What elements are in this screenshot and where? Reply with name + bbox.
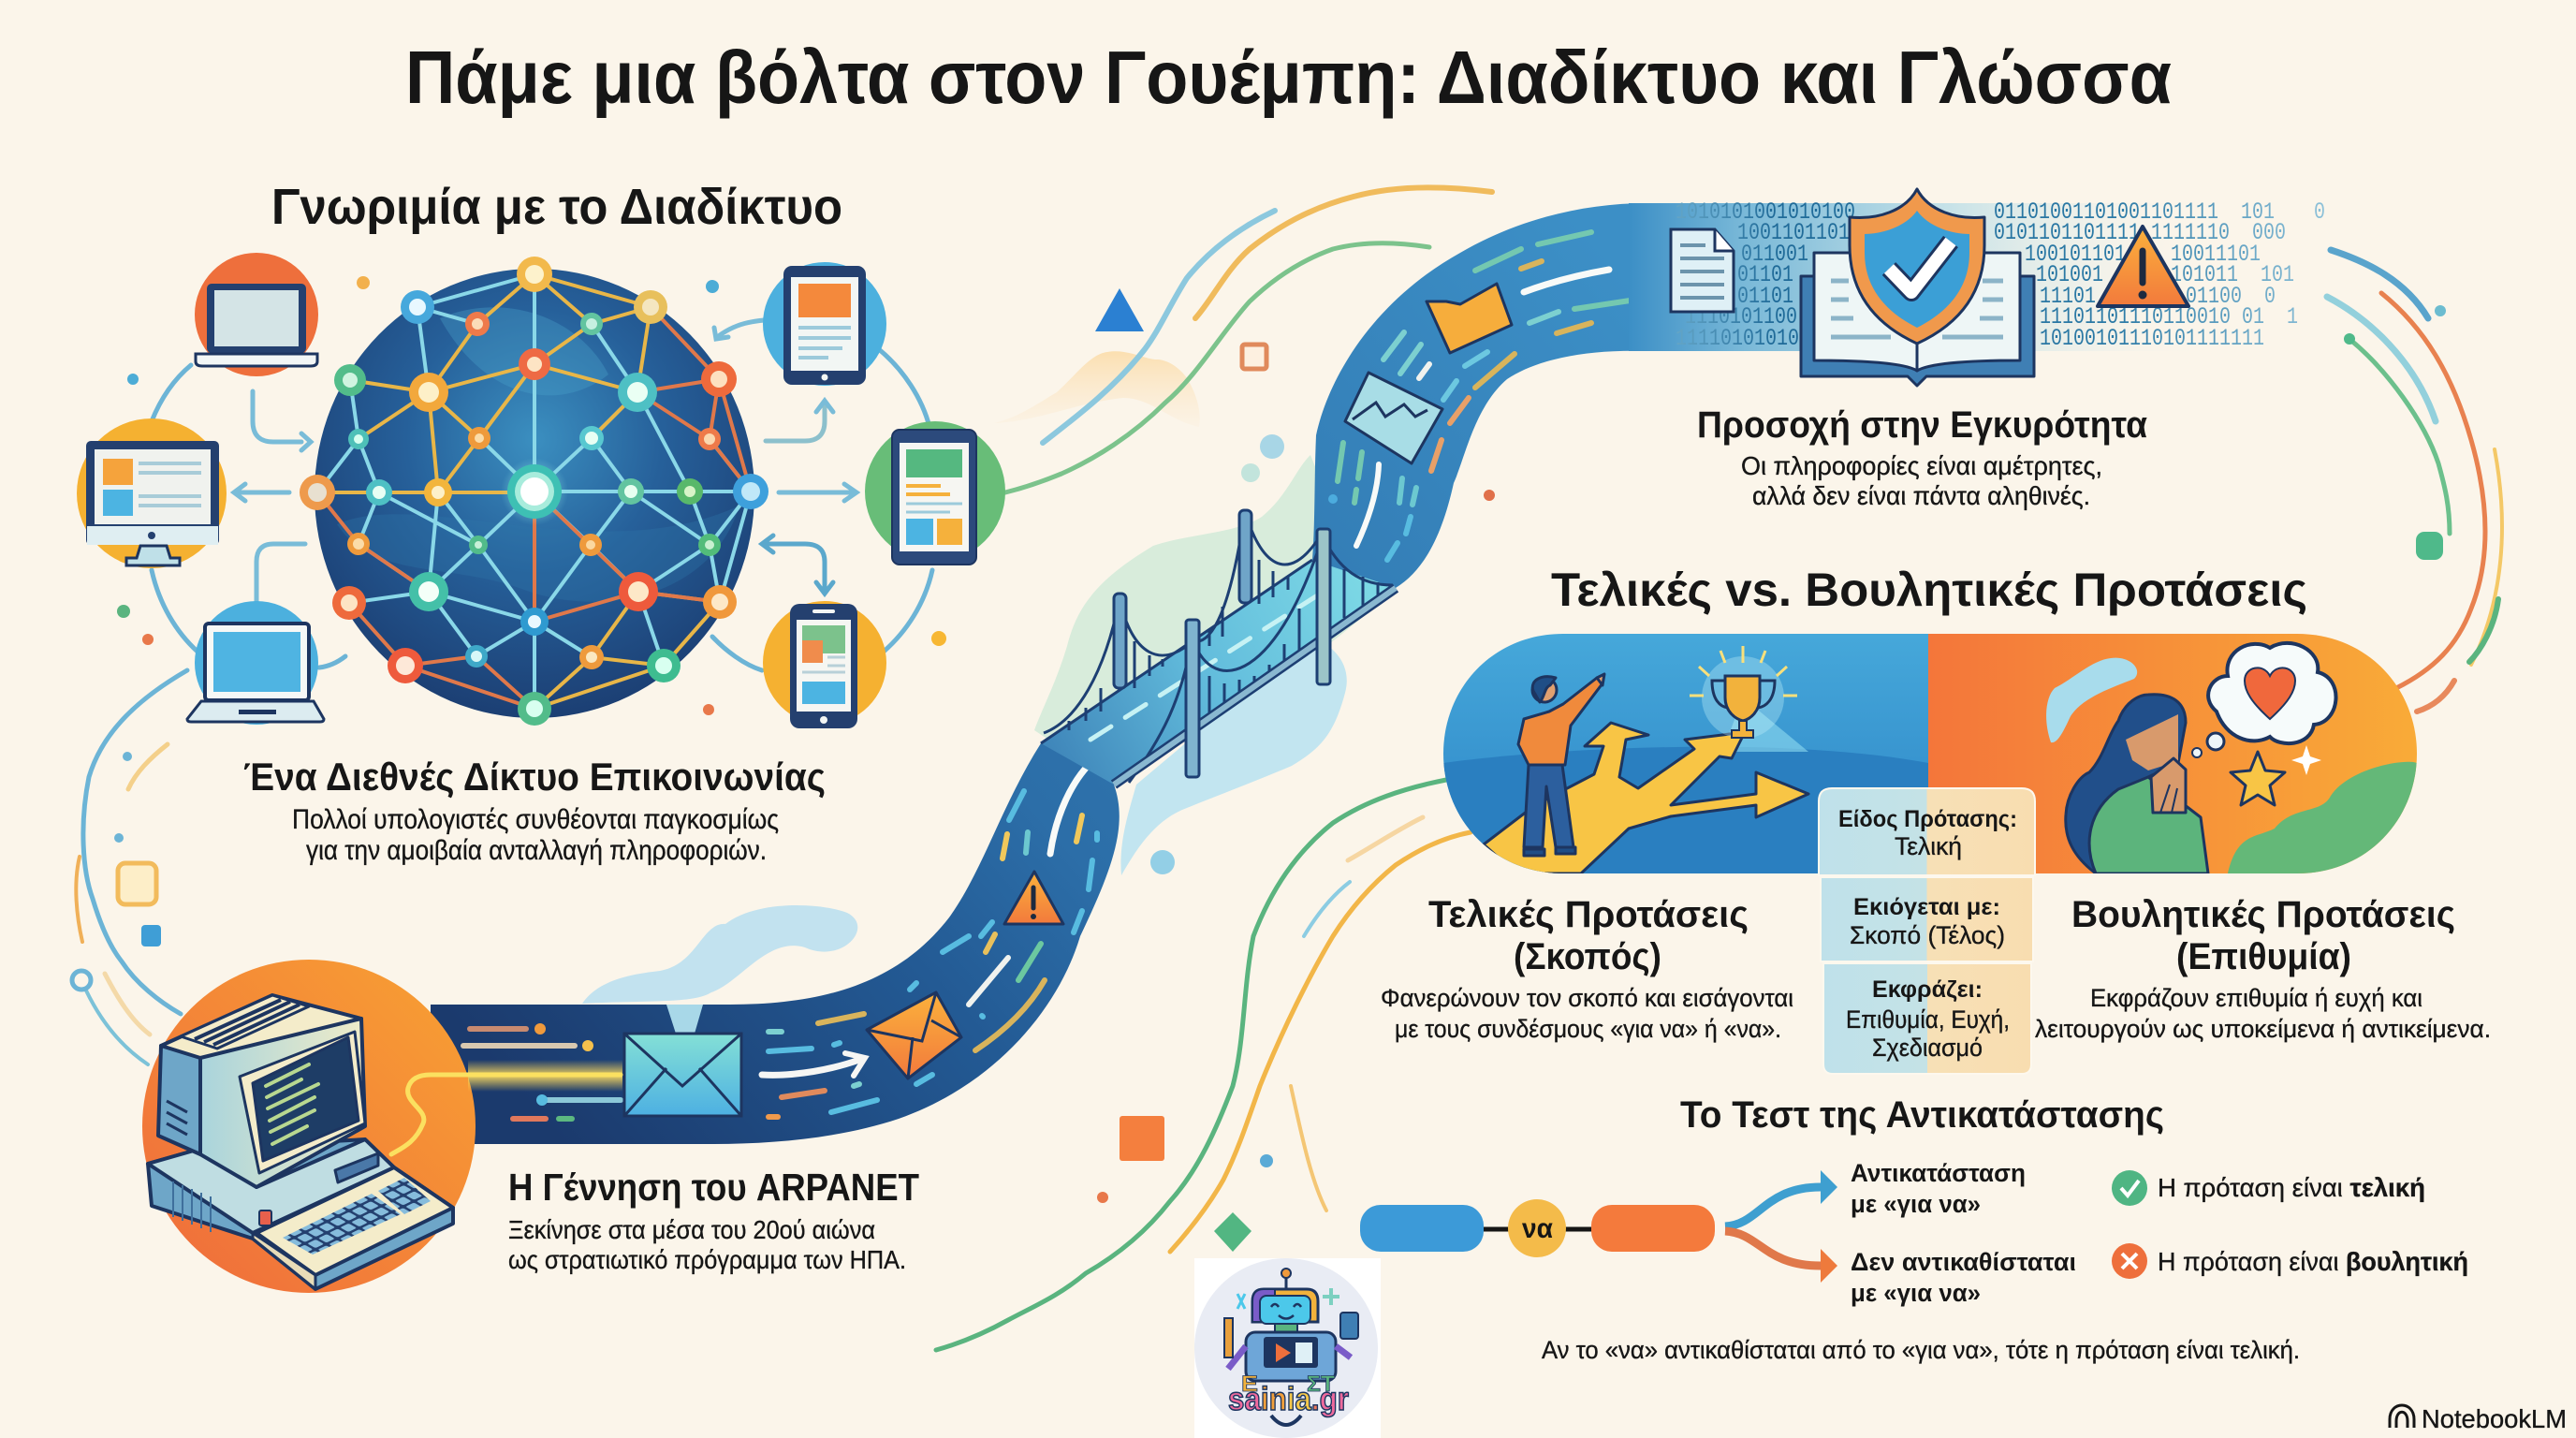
comparison table: Σχεδιασμό [1872, 1034, 1983, 1062]
text: birth of ARPANET: ως στρατιωτικό πρόγραμμα των ΗΠΑ. [508, 1245, 906, 1274]
text: volitional clauses: Βουλητικές Προτάσεις [2071, 894, 2455, 935]
binary data stream fading out: 100101101 10011101 [2025, 241, 2261, 268]
logo: sainia.gr: sainia.gr [1228, 1381, 1349, 1417]
text: final clauses [1381, 894, 1793, 1043]
binary data stream fading out: 01101 [1737, 283, 1793, 310]
text: volitional clauses [2035, 894, 2491, 1043]
icon: shield with check [1850, 189, 1984, 344]
comparison table [1819, 788, 2035, 1074]
icon: thought cloud with heart [2192, 643, 2336, 757]
text: final clauses: (Σκοπός) [1514, 936, 1661, 977]
decorative swooshes: blobs and flowing lines [72, 187, 2502, 1350]
binary data stream fading out: 1110101100 [1685, 303, 1797, 330]
icon: person pointing [1518, 674, 1604, 856]
device: phone bottom-right [763, 601, 886, 728]
heading: getting to know the internet: Γνωριμία με το Διαδίκτυο [271, 179, 842, 235]
binary data stream fading out: 0 [2314, 198, 2325, 226]
title: Πάμε μια βόλτα στον Γουέμπη: Διαδίκτυο και Γλώσσα [405, 36, 2172, 119]
text: final clauses: Φανερώνουν τον σκοπό και εισάγονται [1381, 984, 1793, 1012]
text: attention to validity: Οι πληροφορίες είναι αμέτρητες, [1741, 451, 2102, 480]
text: international network [243, 755, 826, 866]
network connector arcs and arrows [152, 316, 932, 670]
test outcomes text [1851, 1159, 2076, 1307]
binary data stream fading out: 01101 [1737, 261, 1793, 288]
comparison table: Είδος Πρότασης: [1838, 806, 2017, 832]
text: attention to validity: Προσοχή στην Εγκυρότητα [1697, 404, 2147, 446]
binary data stream fading out: 1001101101 [1737, 219, 1850, 246]
text: birth of ARPANET: Ξεκίνησε στα μέσα του 20ού αιώνα [508, 1215, 875, 1244]
icon: torn page [1345, 373, 1442, 463]
binary data stream fading out: 11101 01100 0 [2040, 283, 2276, 310]
text: birth of ARPANET: Η Γέννηση του ARPANET [508, 1166, 919, 1209]
arrows: branching results [1725, 1170, 1837, 1283]
information road [431, 203, 1647, 1144]
binary data stream fading out: 0101101101111 1111110 000 [1994, 219, 2286, 246]
text: international network: Ένα Διεθνές Δίκτυο Επικοινωνίας [243, 755, 826, 799]
heading: substitution test: Το Τεστ της Αντικατάστασης [1680, 1094, 2164, 1136]
binary data stream fading out: 01101001101001101111 101 [1994, 198, 2275, 226]
text: final clauses: Τελικές Προτάσεις [1428, 894, 1749, 935]
icon: document [1671, 229, 1734, 312]
device: desktop monitor [77, 418, 227, 568]
icon: warning on road [1004, 872, 1063, 924]
binary data stream fading out: 101001 1101011 101 [2036, 261, 2294, 288]
icon: star [2231, 752, 2285, 805]
binary data stream fading out [1629, 198, 2325, 352]
icon: trophy [1690, 646, 1797, 739]
text: attention to validity [1697, 404, 2147, 510]
brand: NotebookLM: NotebookLM [2422, 1404, 2567, 1433]
test outcomes text: με «για να» [1851, 1279, 1981, 1307]
binary data stream fading out: 10100101110101111111 [2040, 325, 2264, 352]
icon: forking yellow arrows [1484, 723, 1808, 873]
result: final clause: Η πρόταση είναι τελική [2158, 1173, 2425, 1202]
globe network [300, 257, 768, 726]
logo: sainia.gr: ΣΤ [1307, 1372, 1335, 1397]
panel: final clauses illustration [1443, 634, 1928, 873]
icon: old computer [142, 960, 476, 1293]
panel: volitional clauses illustration [1928, 634, 2417, 873]
logo: sainia.gr [1194, 1258, 1381, 1438]
logo: sainia.gr: Ε [1241, 1372, 1258, 1397]
binary data stream fading out: 1010101001010100 [1676, 198, 1855, 226]
wisp above the road [582, 905, 857, 1004]
device: laptop top-left [195, 253, 318, 376]
heading: final vs volitional clauses: Τελικές vs. Βουλητικές Προτάσεις [1551, 564, 2307, 616]
suspension bridge [1041, 510, 1396, 785]
text: international network: Πολλοί υπολογιστές συνθέονται παγκοσμίως [292, 804, 779, 835]
icon: warning triangle [2098, 227, 2188, 306]
note: test rule: Αν το «να» αντικαθίσταται από το «για να», τότε η πρόταση είναι τελική. [1542, 1336, 2300, 1364]
comparison table: Τελική [1895, 832, 1962, 860]
test outcomes text: Δεν αντικαθίσταται [1851, 1248, 2076, 1276]
icon: woman thinking [2066, 695, 2208, 873]
text: attention to validity: αλλά δεν είναι πάντα αληθινές. [1752, 481, 2090, 510]
text: volitional clauses: λειτουργούν ως υποκείμενα ή αντικείμενα. [2035, 1015, 2491, 1043]
result: volitional clause: Η πρόταση είναι βουλητική [2158, 1247, 2468, 1276]
test outcomes text: Αντικατάσταση [1851, 1159, 2026, 1187]
icon: blue envelope [624, 1005, 741, 1116]
test outcomes text: με «για να» [1851, 1190, 1981, 1218]
text: final clauses: με τους συνδέσμους «για να» ή «να». [1395, 1015, 1781, 1043]
comparison table: Σκοπό (Τέλος) [1850, 921, 2005, 949]
binary data stream fading out: 11101101110110010 01 1 [2040, 303, 2298, 330]
text: international network: για την αμοιβαία ανταλλαγή πληροφοριών. [306, 835, 767, 866]
comparison table: Εκιόγεται με: [1853, 894, 2000, 920]
icon: orange envelope [867, 992, 961, 1078]
diagram: sentence pills with να: να [1522, 1213, 1554, 1244]
data beam from computer [391, 1060, 622, 1154]
device: tablet right [865, 421, 1005, 565]
icon: open book with shield [1801, 189, 2034, 386]
device: laptop bottom-left [187, 601, 324, 725]
text: volitional clauses: Εκφράζουν επιθυμία ή ευχή και [2090, 984, 2422, 1012]
text: volitional clauses: (Επιθυμία) [2176, 936, 2351, 977]
comparison table: Εκφράζει: [1872, 976, 1983, 1003]
device: tablet top-right [763, 262, 886, 386]
text: birth of ARPANET [508, 1166, 919, 1274]
binary data stream fading out: 11110101010 [1676, 325, 1799, 352]
road lane dashes [463, 232, 1636, 1119]
nodes [300, 257, 768, 726]
icon: folder [1427, 284, 1512, 353]
diagram: sentence pills with να [1360, 1199, 1715, 1257]
comparison table: Επιθυμία, Ευχή, [1846, 1005, 2010, 1034]
binary data stream fading out: 011001 [1741, 241, 1808, 268]
result: final clause [2112, 1170, 2425, 1206]
